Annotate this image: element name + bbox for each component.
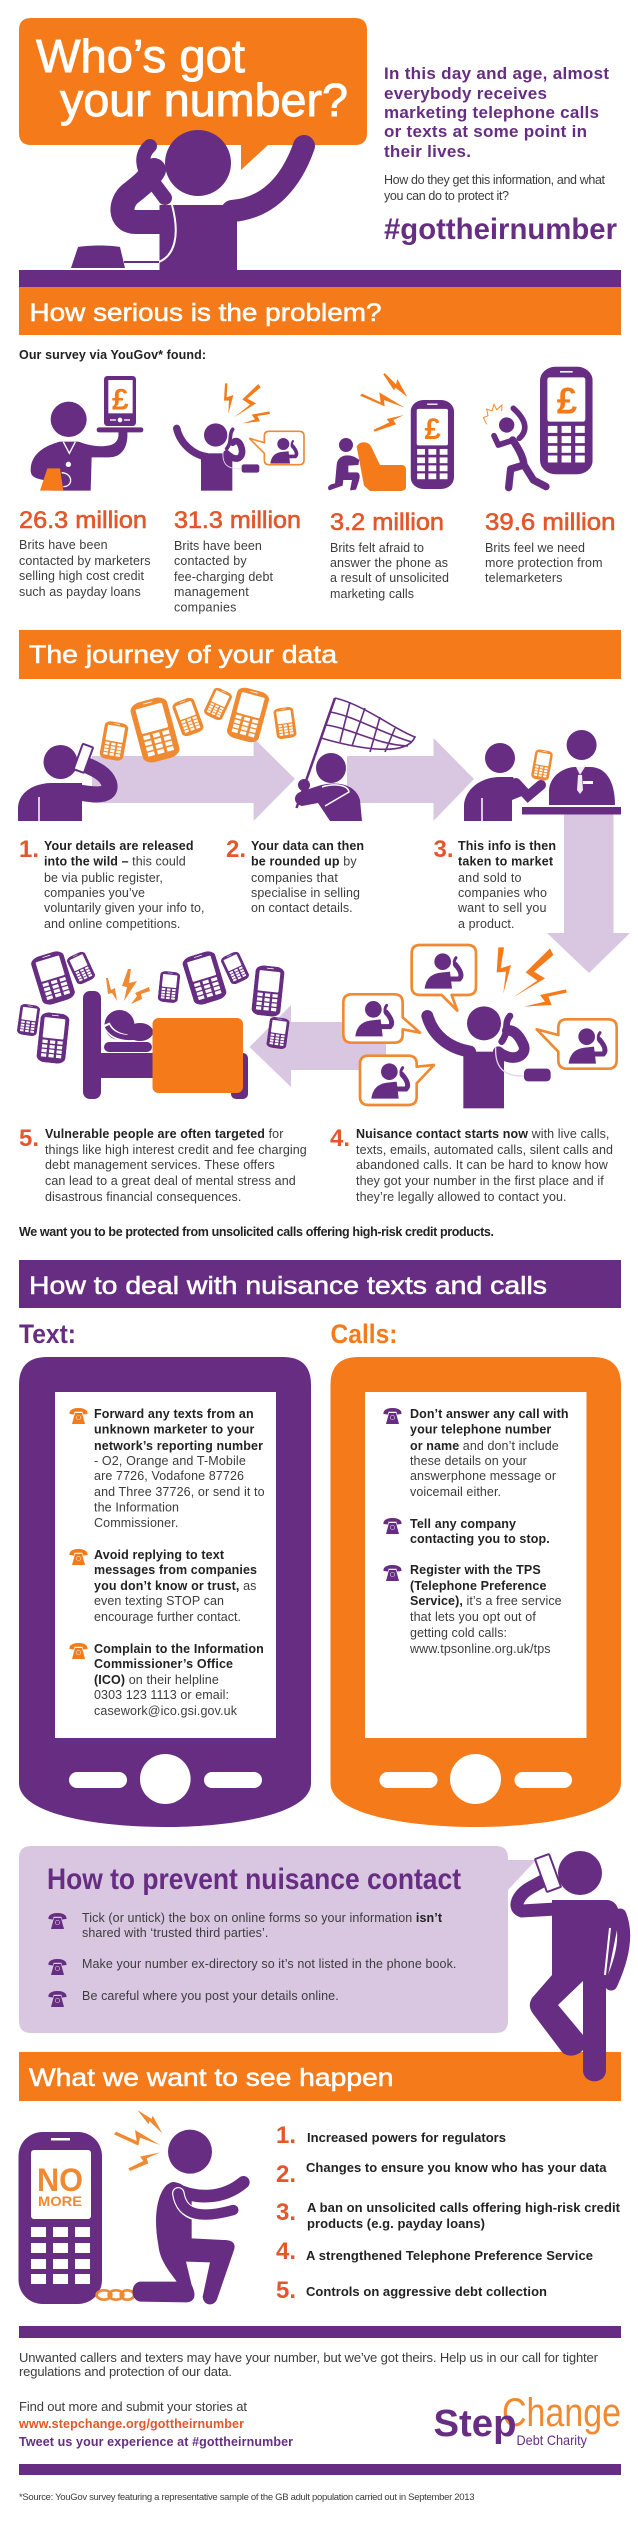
panel: how to prevent nuisance contact [19,1846,536,2033]
footnote: *Source: YouGov survey featuring a representative sample of the GB adult population carried out in September 2013 [19,2492,474,2503]
demand 1: 1. [276,2122,296,2149]
step 1: voluntarily given your info to, [44,901,204,915]
step 1: companies you’ve [44,886,145,900]
title: Who’s got [36,30,245,82]
stat 3 [330,509,449,601]
flying orange phones [99,686,297,765]
arrow 1 [92,738,295,821]
step 3: and sold to [458,871,522,885]
NO MORE phone [18,2132,102,2304]
stat 1: 26.3 million [19,507,147,534]
panel: how to prevent nuisance contact: Be careful where you post your details online. [82,1989,339,2003]
demand 2: Changes to ensure you know who has your data [306,2160,607,2175]
stat 4 [485,509,616,585]
speech bubbles and caller [343,945,617,1108]
step 2: be rounded up by [251,854,357,868]
stat 3: 3.2 million [330,509,444,536]
intro text: marketing telephone calls [384,103,599,122]
title [36,30,348,126]
step 4 [330,1125,613,1204]
step 5: Vulnerable people are often targeted for [45,1127,283,1141]
logo: StepChange Debt Charity: Debt Charity [516,2432,587,2448]
stat 3: marketing calls [330,587,414,601]
icon: person on phone with bubble [177,383,304,491]
demand 3: 3. [276,2199,296,2226]
section heading: what we want to see happen [19,2052,621,2101]
call tip 2 [410,1517,550,1546]
step 4: Nuisance contact starts now with live calls, [356,1127,609,1141]
stat 3: Brits felt afraid to [330,541,424,555]
step 5: 5. [19,1125,39,1152]
figure 2: person with net [295,698,415,821]
call tip 2: Tell any company [410,1517,516,1531]
stat 2 [174,507,301,614]
text tip 2: you don’t know or trust, as [94,1579,256,1593]
stat 1: contacted by marketers [19,554,150,568]
call tip 1: your telephone number [410,1422,551,1436]
text tip 1: unknown marketer to your [94,1422,255,1436]
NO MORE phone: MORE [38,2193,82,2209]
panel: orange phone with calls advice [330,1357,621,1827]
stat 2: Brits have been [174,539,262,553]
stat 2: contacted by [174,554,247,568]
demand 1: Increased powers for regulators [307,2130,506,2145]
call tip 1 [410,1407,568,1499]
step 4: 4. [330,1125,350,1152]
demand 2 [276,2160,607,2188]
arrow 3 [547,813,630,973]
text tip 1 [94,1407,265,1530]
call tip 3: Service), it’s a free service [410,1594,562,1608]
section heading: journey [19,630,621,679]
intro text: their lives. [384,142,471,161]
stat 3: a result of unsolicited [330,571,449,585]
panel: how to prevent nuisance contact: How to prevent nuisance contact [47,1863,461,1896]
demand 3: products (e.g. payday loans) [307,2216,485,2231]
leaning figure on mobile [517,1851,624,2081]
step 3: taken to market [458,854,554,868]
step 2: Your data can then [251,839,364,853]
text column heading: Text: [19,1319,76,1349]
section heading: how serious [19,287,621,335]
panel: how to prevent nuisance contact: shared with ‘trusted third parties’. [82,1926,268,1940]
call to action text [19,2350,599,2379]
text tip 3: 0303 123 1113 or email: [94,1688,229,1702]
stat 1: selling high cost credit [19,569,145,583]
step 1: 1. [19,836,39,863]
text tip 2: Avoid replying to text [94,1548,225,1562]
call to action text: regulations and protection of our data. [19,2364,232,2379]
step 1: and online competitions. [44,917,180,931]
stat 1 [19,507,150,599]
purple divider bar [19,2326,621,2338]
step 1: be via public register, [44,871,163,885]
step 3: a product. [458,917,514,931]
purple divider bar [19,2464,621,2475]
icon: hiding behind chair from phone [328,373,454,491]
figure 1: person on mobile [18,744,110,821]
step 4: texts, emails, automated calls, silent calls and [356,1143,613,1157]
step 2: companies that [251,871,338,885]
stat 4: Brits feel we need [485,541,585,555]
demand 4 [276,2238,593,2265]
call tip 1: or name and don’t include [410,1439,559,1453]
step 5: can lead to a great deal of mental stress and [45,1174,296,1188]
step 3: want to sell you [457,901,546,915]
protection statement: We want you to be protected from unsolicited calls offering high-risk credit products. [19,1225,494,1239]
step 4: they got your number in the first place and if [356,1174,604,1188]
text tip 2: encourage further contact. [94,1610,241,1624]
find out more links [18,2399,293,2449]
demand 5: 5. [276,2277,296,2304]
call tip 1: these details on your [410,1454,527,1468]
call to action text: Unwanted callers and texters may have your number, but we’ve got theirs. Help us in our call for tighter [19,2350,599,2365]
text tip 1: are 7726, Vodafone 87726 [94,1469,244,1483]
intro text [384,64,609,203]
step 5 [19,1125,307,1204]
icon: hiding behind chair from phone: £ [425,413,442,446]
demand 3 [276,2199,621,2231]
calls column heading: Calls: [330,1319,398,1349]
header speech bubble [19,18,367,170]
step 2 [226,836,364,915]
step 5: things like high interest credit and fee charging [45,1143,307,1157]
text tip 3: Complain to the Information [94,1642,264,1656]
text tip 2 [94,1548,257,1624]
step 1: Your details are released [44,839,194,853]
call tip 1: Don’t answer any call with [410,1407,568,1421]
stat 2: management [174,585,249,599]
demand 4: 4. [276,2238,296,2265]
call tip 3: that lets you opt out of [410,1610,536,1624]
text tip 3: casework@ico.gsi.gov.uk [94,1704,238,1718]
demand 5: Controls on aggressive debt collection [306,2284,547,2299]
step 3 [434,836,556,931]
text tip 3: (ICO) on their helpline [94,1673,219,1687]
icon: cowering from giant phone: £ [557,381,578,422]
logo: StepChange Debt Charity [434,2391,621,2448]
panel: how to prevent nuisance contact: Make your number ex-directory so it’s not listed in the phone book. [82,1957,456,1971]
demand 4: A strengthened Telephone Preference Service [306,2248,593,2263]
stat 4: more protection from [485,556,602,570]
text tip 3 [94,1642,264,1718]
panel: how to prevent nuisance contact: Tick (or untick) the box on online forms so your information isn’t [82,1911,443,1925]
section heading: how to deal [19,1260,621,1308]
stat 1: such as payday loans [19,585,141,599]
call tip 3: getting cold calls: [410,1626,507,1640]
step 3: 3. [434,836,454,863]
call tip 1: voicemail either. [410,1485,501,1499]
stat 4: telemarketers [485,571,562,585]
step 2: specialise in selling [251,886,360,900]
step 4: they’re legally allowed to contact you. [356,1190,566,1204]
kneeling chained figure [97,2110,243,2304]
intro text: How do they get this information, and what [384,173,606,187]
text tip 1: the Information [94,1500,179,1514]
call tip 2: contacting you to stop. [410,1532,550,1546]
panel: purple phone with text advice [19,1357,311,1827]
NO MORE phone: NO [37,2162,83,2198]
arrow 2 [347,738,474,821]
intro text: or texts at some point in [384,122,587,141]
stat 2: 31.3 million [174,507,301,534]
find out more links: Find out more and submit your stories at [19,2399,247,2414]
icon: cowering from giant phone [483,367,593,488]
section heading: how serious: How serious is the problem? [30,299,382,327]
call tip 3 [409,1563,562,1656]
find out more links: www.stepchange.org/gottheirnumber [18,2417,244,2431]
step 3: This info is then [458,839,556,853]
section heading: how to deal: How to deal with nuisance texts and calls [29,1272,547,1300]
demands list [276,2122,621,2304]
call tip 3: Register with the TPS [410,1563,541,1577]
hashtag: #gottheirnumber [384,213,617,246]
text tip 2: even texting STOP can [94,1594,224,1608]
step 1: into the wild – this could [44,854,186,868]
step 5: debt management services. These offers [45,1158,275,1172]
stat 2: companies [174,600,236,614]
left arrow [250,1005,386,1087]
intro text: everybody receives [384,84,547,103]
text tip 1: network’s reporting number [94,1439,263,1453]
stat 2: fee-charging debt [174,570,274,584]
demand 5 [276,2277,547,2304]
title: your number? [60,74,348,126]
person in bed [83,969,248,1099]
logo: StepChange Debt Charity: Step [434,2403,516,2445]
call tip 1: answerphone message or [410,1469,556,1483]
purple bar [19,270,621,287]
step 2: 2. [226,836,246,863]
intro text: In this day and age, almost [384,64,609,83]
survey intro: Our survey via YouGov* found: [19,348,206,362]
icon: waiter serving phone [31,376,143,491]
intro text: you can do to protect it? [384,189,509,203]
step 2: on contact details. [251,901,353,915]
demand 2: 2. [276,2161,296,2188]
stat 1: Brits have been [19,538,108,552]
find out more links: Tweet us your experience at #gottheirnumber [19,2435,293,2449]
step 5: disastrous financial consequences. [45,1190,241,1204]
step 3: companies who [458,886,547,900]
text tip 1: and Three 37726, or send it to [94,1485,265,1499]
stat 4: 39.6 million [485,509,616,536]
stat 3: answer the phone as [330,556,448,570]
step 1 [19,836,204,931]
figure 3: person selling at counter [464,730,621,821]
call tip 3: www.tpsonline.org.uk/tps [409,1642,550,1656]
text tip 1: Commissioner. [94,1516,178,1530]
logo: StepChange Debt Charity: Change [502,2391,621,2435]
icon: waiter serving phone: £ [112,383,129,416]
text tip 3: Commissioner’s Office [94,1657,233,1671]
demand 3: A ban on unsolicited calls offering high-risk credit [307,2200,621,2215]
text tip 2: messages from companies [94,1563,257,1577]
text tip 1: - O2, Orange and T-Mobile [94,1454,246,1468]
section heading: what we want to see happen: What we want to see happen [29,2064,394,2092]
step 4: abandoned calls. It can be hard to know how [356,1158,609,1172]
text tip 1: Forward any texts from an [94,1407,254,1421]
demand 1 [276,2122,506,2149]
purple phones around bed [16,949,290,1064]
header figure on the telephone [71,130,304,270]
call tip 3: (Telephone Preference [410,1579,546,1593]
section heading: journey: The journey of your data [29,641,337,669]
